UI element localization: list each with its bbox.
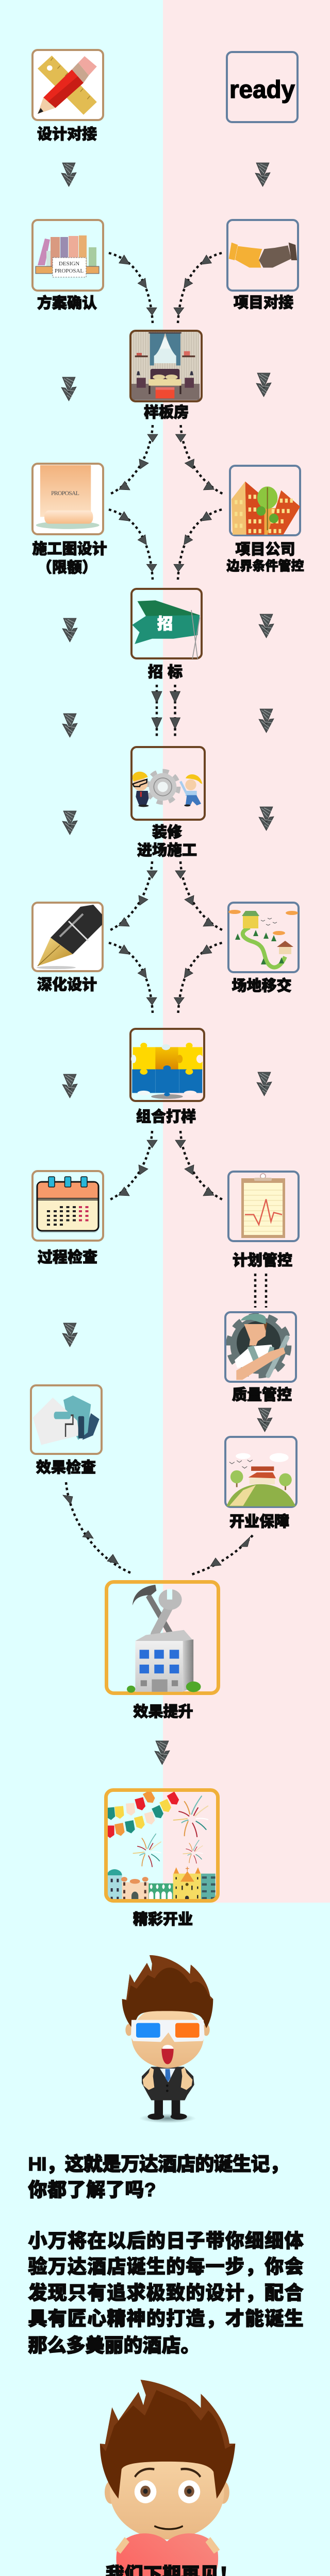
arrow: double straight dotted [152, 685, 180, 736]
panel: 设计对接 [32, 50, 103, 120]
arrow: right column down 2 [256, 373, 271, 397]
panel: 施工图设计 [32, 464, 103, 534]
arrow: right column down 5 [259, 807, 274, 831]
panel: 组合打样 [130, 1029, 204, 1101]
arrow: left column down 5 [62, 811, 77, 835]
arrow: right column down 7 [257, 1408, 272, 1432]
icon: books: DESIGN [59, 261, 79, 267]
icon: mechanic with wrench [228, 1314, 289, 1380]
icon: bedroom [130, 331, 200, 400]
label: 方案确认: 方案确认 [37, 294, 97, 312]
icon: pennants [106, 1790, 180, 1838]
arrow: left column down 2 [61, 377, 76, 401]
arrow: 设计对接 down [61, 163, 76, 187]
icon: hill and house [227, 1453, 295, 1506]
icon: books: PROPOSAL [55, 268, 84, 274]
panel: 项目公司 [230, 466, 300, 535]
icon: fountain pen [37, 905, 102, 969]
label: 项目公司: 项目公司 [235, 541, 295, 558]
label: 样板房: 样板房 [144, 404, 189, 421]
arrow: right column down 3 [259, 614, 274, 638]
arrow: curve diverge right 3 [175, 1131, 224, 1200]
label: 施工图设计: 施工图设计 [32, 540, 107, 557]
arrow: curve diverge right 2 [175, 861, 224, 931]
icon: buildings [232, 481, 300, 535]
arrow: curve converge left 1 [109, 253, 157, 323]
panel: 样板房 [130, 331, 202, 401]
panel: ready [227, 52, 298, 122]
text block: paragraph: 那么多美丽的酒店。 [28, 2335, 200, 2356]
arrow: left column down 6 [62, 1074, 77, 1098]
arrow: curve diverge left 2 [108, 861, 157, 931]
panel: 效果提升 [106, 1582, 219, 1693]
text block: paragraph: 发现只有追求极致的设计，配合 [28, 2282, 303, 2303]
label: 招标: 招 标 [148, 664, 183, 681]
panel: 深化设计 [32, 903, 103, 971]
label: 进场施工: 进场施工 [137, 842, 197, 859]
text block: paragraph: 验万达酒店诞生的每一步，你会 [28, 2256, 303, 2277]
arrow: curve diverge left 3 [108, 1131, 157, 1200]
text block: paragraph [28, 2230, 303, 2356]
arrow: left column down 3 [62, 618, 77, 642]
icon: clipboard [241, 1174, 285, 1238]
icon: handshake [229, 243, 297, 267]
text: flag character: 招 [157, 616, 173, 633]
label: 精彩开业: 精彩开业 [133, 1911, 193, 1928]
label: 设计对接: 设计对接 [37, 126, 97, 143]
label: 效果检查: 效果检查 [36, 1459, 96, 1476]
label: 质量管控: 质量管控 [232, 1386, 292, 1403]
icon: calendar [37, 1177, 98, 1233]
label: 项目对接: 项目对接 [234, 294, 293, 311]
icon: green flag [132, 600, 200, 659]
panel: 开业保障 [225, 1437, 296, 1507]
arrow: curve diverge left 1 [109, 425, 158, 495]
arrow: curve to 效果提升 left [63, 1482, 132, 1573]
icon: gear and workers [133, 771, 202, 807]
character: boy holding heart [100, 2380, 235, 2576]
arrow: curve converge right 1 [174, 253, 222, 323]
panel: 精彩开业 [106, 1790, 218, 1901]
text: proposal: PROPOSAL [51, 489, 79, 497]
label: 限额: （限额） [37, 559, 97, 576]
label: 计划管控: 计划管控 [233, 1251, 292, 1269]
text block: intro line 2: 你都了解了吗? [28, 2179, 156, 2200]
panel: 计划管控 [228, 1172, 299, 1241]
arrow: left column down 7 [62, 1323, 77, 1347]
label: 组合打样: 组合打样 [136, 1108, 196, 1125]
text block: intro: HI，这就是万达酒店的诞生记， [28, 2154, 289, 2175]
character: boy with 3D glasses [122, 1955, 213, 2123]
panel: 项目对接 [227, 220, 298, 291]
icon: festival scene [106, 1790, 216, 1900]
arrow: curve converge left 3 [109, 943, 157, 1013]
label: 效果提升: 效果提升 [133, 1703, 193, 1720]
panel: 招标 [131, 589, 202, 659]
text block: paragraph: 具有匠心精神的打造，才能诞生 [28, 2308, 303, 2329]
icon: house and roller [33, 1396, 100, 1445]
text: ready: ready [229, 76, 295, 104]
panel: 过程检查 [32, 1171, 103, 1241]
label: 开业保障: 开业保障 [229, 1513, 289, 1530]
icon: books [36, 235, 99, 277]
panel: 效果检查 [31, 1385, 102, 1454]
arrow: dotted link to 质量管控 [255, 1274, 266, 1308]
label: 场地移交: 场地移交 [232, 977, 292, 994]
text block: paragraph: 小万将在以后的日子带你细细体 [28, 2230, 303, 2251]
icon: ruler and pencil [38, 56, 97, 115]
label: 边界条件管控: 边界条件管控 [226, 558, 304, 573]
arrow: left column down 4 [62, 714, 77, 737]
icon: hammer wrench building [127, 1585, 201, 1692]
label: 深化设计: 深化设计 [37, 976, 97, 993]
arrow: curve to 效果提升 right [192, 1535, 253, 1574]
panel: 场地移交 [228, 903, 299, 972]
panel: 方案确认 [32, 220, 103, 291]
icon: landscape map [228, 910, 298, 968]
arrow: curve diverge right 1 [175, 425, 225, 495]
arrow: curve converge right 3 [174, 943, 222, 1013]
label: 过程检查: 过程检查 [38, 1248, 97, 1266]
icon: puzzle [131, 1043, 203, 1099]
arrow: right column down 6 [257, 1072, 272, 1096]
arrow: center down [155, 1741, 170, 1765]
panel: 质量管控 [225, 1312, 296, 1382]
icon: fireworks [133, 1796, 208, 1867]
panel: 装修 [131, 747, 205, 820]
icon: city skyline [107, 1867, 216, 1900]
arrow: curve converge left 2 [109, 510, 157, 580]
arrow: ready down [255, 163, 270, 187]
arrow: curve converge right 2 [174, 510, 222, 580]
arrow: right column down 4 [259, 709, 274, 733]
label: 装修: 装修 [152, 824, 182, 841]
icon: proposal scroll [36, 465, 100, 529]
